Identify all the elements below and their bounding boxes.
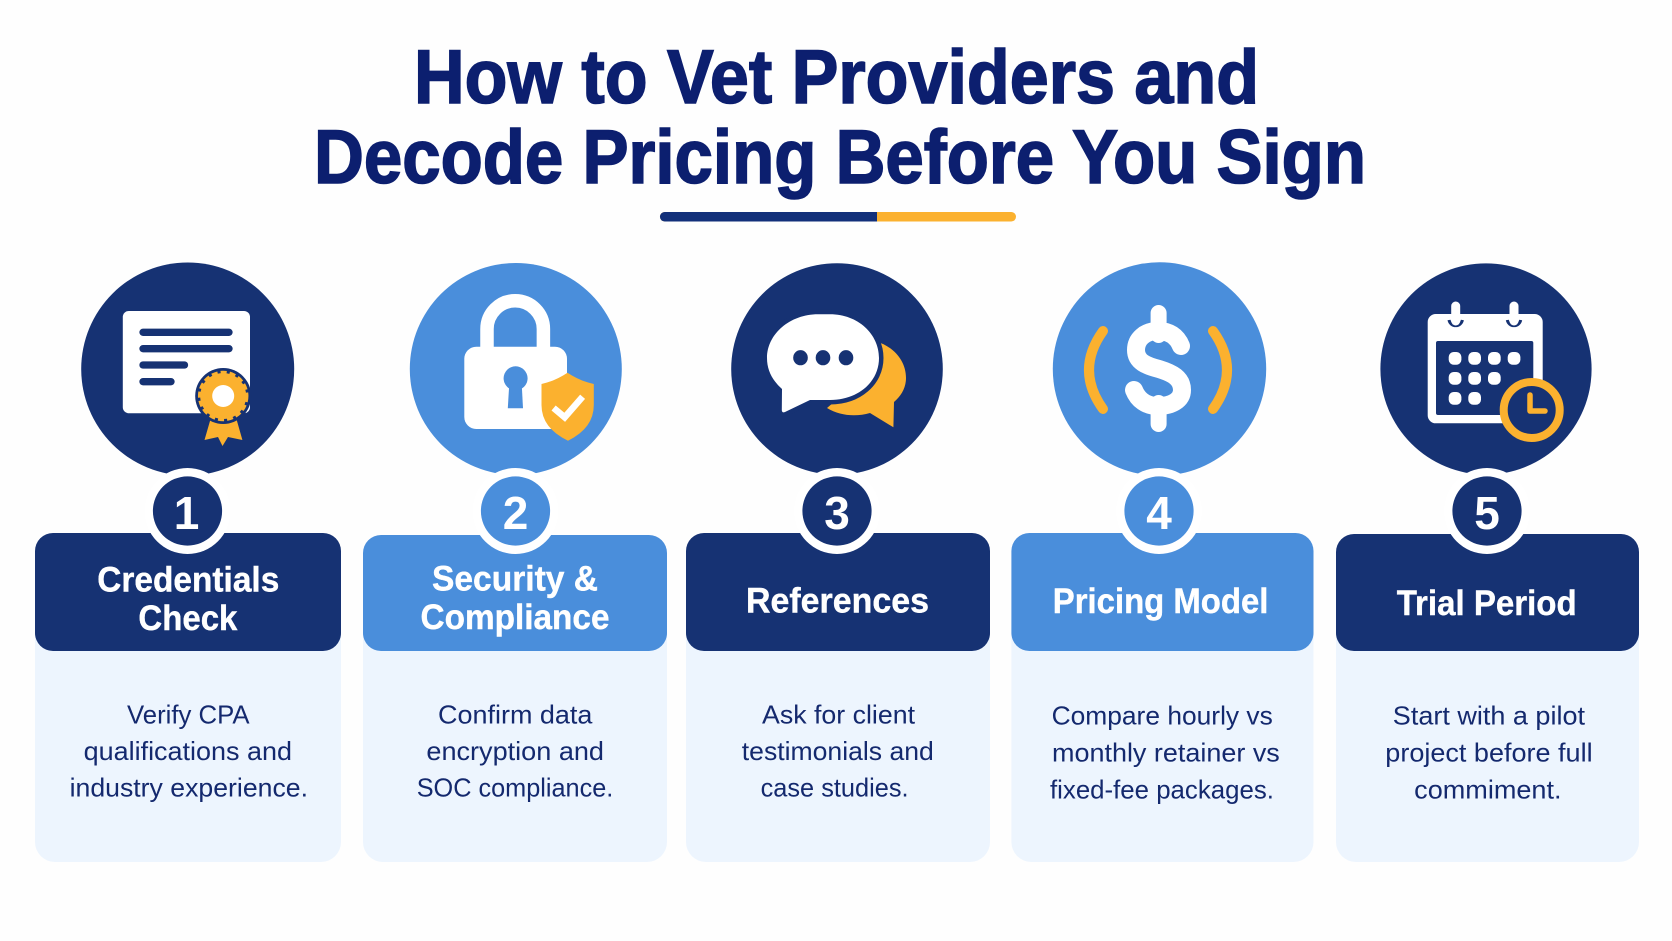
panel: step 5 trial period: [1336, 263, 1639, 862]
icon: calendar with clock: [1380, 263, 1592, 475]
heading bar: [1011, 533, 1314, 651]
description: Start with a pilot: [1393, 700, 1586, 730]
description: SOC compliance.: [417, 773, 613, 803]
description: encryption and: [426, 736, 604, 766]
description: [70, 699, 308, 803]
heading: credentials check: Check: [138, 599, 238, 638]
heading: credentials check: Credentials: [97, 561, 279, 600]
card body: [363, 600, 667, 862]
number badge 1: 1: [174, 487, 199, 539]
panel: step 1 credentials check: [35, 262, 341, 862]
panel: step 2 security and compliance: [363, 263, 667, 862]
heading: pricing model: Pricing Model: [1053, 582, 1268, 621]
description: Verify CPA: [127, 699, 250, 729]
description: case studies.: [761, 773, 909, 803]
heading bar: [363, 535, 667, 651]
heading bar: [1336, 534, 1639, 651]
description: [1050, 700, 1280, 804]
description: Ask for client: [762, 699, 916, 729]
heading: trial period: Trial Period: [1397, 584, 1577, 623]
title: Decode Pricing Before You Sign: [314, 115, 1366, 200]
number badge 2: [472, 468, 558, 554]
description: monthly retainer vs: [1052, 738, 1280, 768]
number badge 5: 5: [1474, 487, 1500, 539]
icon: dollar sign with brackets: [1053, 262, 1266, 476]
panel: step 3 references: [686, 263, 990, 862]
card body: [1011, 600, 1314, 862]
description: [1385, 700, 1593, 804]
title: [314, 35, 1366, 200]
heading: security and compliance: Security &: [432, 560, 598, 599]
number badge 5: [1444, 468, 1530, 554]
description: project before full: [1385, 738, 1593, 768]
number badge 3: [794, 468, 880, 554]
heading: security and compliance: [420, 560, 610, 637]
heading bar: [35, 533, 341, 651]
icon: speech bubbles: [731, 263, 943, 475]
number badge 1: [144, 468, 230, 554]
number badge 4: [1116, 468, 1202, 554]
number badge 4: 4: [1146, 487, 1172, 539]
heading: references: References: [746, 582, 929, 621]
description: fixed-fee packages.: [1050, 774, 1274, 804]
card body: [1336, 600, 1639, 862]
description: qualifications and: [84, 736, 292, 766]
description: [417, 699, 613, 803]
panel: step 4 pricing model: [1011, 262, 1314, 862]
description: testimonials and: [742, 736, 934, 766]
description: industry experience.: [70, 773, 308, 803]
heading: credentials check: [97, 561, 279, 638]
heading bar: [686, 533, 990, 651]
description: Compare hourly vs: [1052, 700, 1273, 730]
number badge 2: 2: [503, 487, 528, 539]
icon: padlock with shield: [410, 263, 622, 475]
heading: security and compliance: Compliance: [420, 598, 610, 637]
description: commiment.: [1414, 774, 1562, 804]
card body: [686, 600, 990, 862]
number badge 3: 3: [824, 487, 850, 539]
card body: [35, 600, 341, 862]
description: [742, 699, 934, 803]
title accent bar: [660, 212, 1016, 222]
description: Confirm data: [438, 699, 593, 729]
icon: certificate with ribbon: [81, 262, 294, 476]
title: How to Vet Providers and: [414, 35, 1259, 120]
